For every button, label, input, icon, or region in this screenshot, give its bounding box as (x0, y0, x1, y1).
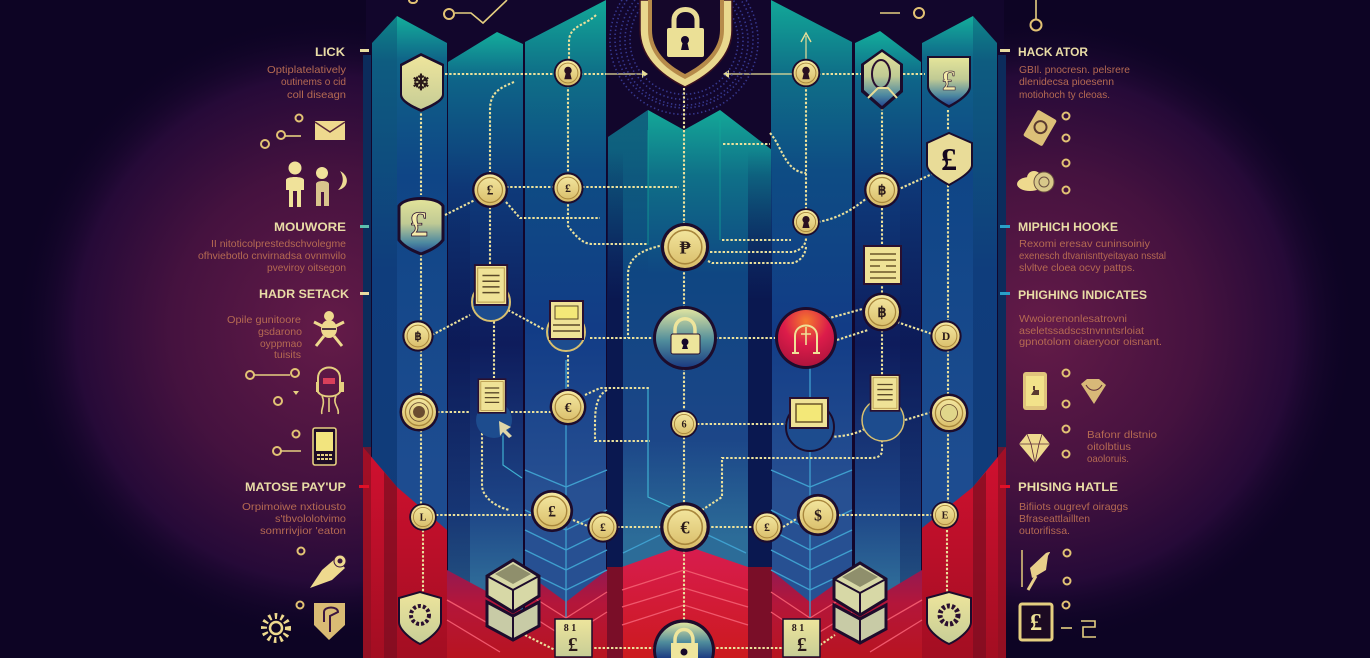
nodes: lower coin row: £ (764, 521, 770, 534)
text: lick description: coll diseagn (287, 89, 346, 101)
nodes: lower coin row (409, 490, 959, 552)
node: bottom lock (653, 619, 715, 658)
nodes: coin row one (472, 172, 900, 271)
text: gem caption (1087, 429, 1157, 465)
icons: left envelope and links (261, 114, 345, 148)
nodes: coin row one: £ (487, 183, 494, 198)
text: mouwore description: ofhviebotlo cnvirnadsa ovnmvilo (198, 250, 346, 262)
icon: pound crest (399, 198, 443, 254)
icon: phone right (1023, 372, 1047, 410)
side tick marks (359, 49, 1010, 488)
icon: document left with base (472, 265, 510, 321)
icon: document with cursor (476, 379, 512, 438)
icon: pound tag left (555, 619, 592, 657)
icon: phone left (313, 428, 336, 465)
panel: left text blocks (198, 45, 349, 537)
node: keyhole right (792, 59, 820, 87)
icon: sun gear (264, 602, 304, 640)
heading: lick: LICK (315, 45, 345, 59)
icon: box stack left (487, 560, 539, 640)
icons: connector rings left (246, 369, 301, 455)
node: left coin (402, 320, 434, 352)
text: hack ator description: motiohoch ty cleoas. (1019, 89, 1110, 101)
icon: pound shield second: £ (941, 141, 957, 177)
icon: pound tag right: 8 1 (792, 623, 804, 634)
icon: pound box: £ (1030, 610, 1042, 636)
icon: virus shield top left (400, 53, 444, 112)
node: red alert (775, 307, 837, 369)
heading: matose pay up: MATOSE PAY'UP (245, 480, 346, 494)
nodes: lower coin row: $ (814, 508, 822, 525)
icon: person shield (861, 49, 903, 110)
icon: monitor with base (786, 398, 834, 451)
text: miphich description: slvltve cloea ocvy pattps. (1019, 262, 1135, 274)
arrow: left link to shield (605, 70, 648, 78)
text: phising description: outorifissa. (1019, 525, 1070, 537)
text: lick description (267, 64, 347, 101)
heading: hadr setack: HADR SETACK (259, 287, 349, 301)
text: gem caption: Bafonr dlstnio (1087, 429, 1157, 441)
text: lick description: Optiplatelatively (267, 64, 347, 76)
text: hack ator description: dlenidecsa pioesenn (1019, 76, 1114, 88)
network dotted connectors (421, 15, 948, 650)
text: phighing description: aseletssadscstnvnntsrloiat (1019, 325, 1144, 337)
text: phising description: Bifiiots ougrevf oiraggs (1019, 501, 1128, 513)
nodes: lower coin row: E (942, 511, 949, 522)
heading: hack ator: HACK ATOR (1018, 45, 1088, 59)
nodes: coin row two: € (565, 400, 572, 415)
icon: gear shield right (927, 592, 971, 644)
text: gem caption: oitolbtius (1087, 441, 1131, 453)
icon: central shield with halo (610, 0, 758, 114)
icon: tag (1023, 110, 1057, 146)
text: hadr setack description: tuisits (274, 349, 301, 361)
text: mouwore description (198, 238, 346, 274)
panel: red base (363, 120, 1006, 658)
panel: column structure (363, 0, 1006, 658)
text: matose description: s'tbvololotvimo (275, 513, 346, 525)
nodes: coin row two (399, 292, 969, 438)
text: mouwore description: II nitoticolprestedschvolegme (211, 238, 346, 250)
text: lick description: outinems o cid (281, 76, 346, 88)
icon: pound shield top right: £ (942, 66, 956, 97)
icon: dash and glyph (1061, 621, 1096, 637)
text: phising description (1019, 501, 1128, 537)
text: matose description (242, 501, 346, 537)
icon: crest shield (314, 603, 345, 640)
icon: virus shield top left: ❄ (412, 70, 430, 95)
icon: box stack right (834, 563, 886, 643)
heading: phising hatle: PHISING HATLE (1018, 480, 1118, 494)
heading: miphich hooke: MIPHICH HOOKE (1018, 220, 1118, 234)
text: miphich description: Rexomi eresav cuninsoiniy (1019, 238, 1151, 250)
arrow: right link to shield (723, 70, 793, 78)
nodes: lower coin row: £ (548, 504, 556, 521)
arrow: upward (801, 33, 811, 60)
icon: key (298, 548, 346, 588)
top connector left (409, 0, 507, 23)
top connector right (880, 0, 1042, 30)
icon: screen with base (547, 301, 585, 351)
nodes: coin row two: D (942, 330, 950, 343)
icon: pound tag left: 8 1 (564, 623, 576, 634)
heading: phighing indicates: PHIGHING INDICATES (1018, 288, 1147, 302)
icon: pound box (1020, 604, 1052, 640)
text: matose description: somrrivjior 'eaton (260, 525, 346, 537)
text: miphich description (1019, 238, 1166, 274)
node: keyhole left (554, 59, 582, 87)
icon: gear shield left (399, 592, 441, 644)
icon: pound shield second (927, 133, 972, 185)
icon: pound tag right: £ (797, 634, 807, 656)
icons: right connector rings (1062, 112, 1070, 608)
text: phising description: Bfraseattlaillten (1019, 513, 1090, 525)
text: mouwore description: pveviroy oitsegon (267, 262, 346, 274)
icon: policy document (864, 246, 901, 284)
icon: two people (286, 162, 347, 207)
text: hack ator description (1019, 64, 1130, 101)
nodes: lower coin row: € (680, 517, 690, 537)
nodes: coin row two: 6 (681, 420, 687, 431)
text: hadr setack description (227, 314, 302, 361)
icon: diamond (1019, 434, 1050, 463)
text: phighing description (1019, 313, 1162, 348)
icon: rocket (1022, 550, 1050, 590)
icon: bug (314, 311, 344, 346)
icon: pound tag left: £ (568, 634, 578, 656)
text: phighing description: Wwoiorenonlesatrovni (1019, 313, 1127, 325)
text: hadr setack description: Opile gunitoore (227, 314, 301, 326)
text: hadr setack description: gsdarono (258, 326, 302, 338)
icon: headset figure (316, 368, 344, 414)
panel: right text blocks (1018, 45, 1166, 537)
icon: cloud coin (1017, 171, 1054, 192)
nodes: lower coin row: £ (600, 521, 606, 534)
text: matose description: Orpimoiwe nxtiousto (242, 501, 346, 513)
icon: heart gem (1081, 379, 1106, 404)
text: phighing description: gpnotolom oiaeryoor oisnant. (1019, 336, 1162, 348)
text: hack ator description: GBIl. pnocresn. pelsrere (1019, 64, 1130, 76)
nodes: lower coin row: L (420, 513, 427, 524)
text: miphich description: exenesch dtvanisnttyeitayao nsstal (1019, 250, 1166, 262)
text: gem caption: oaoloruis. (1087, 453, 1129, 465)
icon: document on base right (862, 375, 904, 441)
heading: mouwore: MOUWORE (274, 220, 346, 234)
text: hadr setack description: oyppmao (260, 338, 302, 350)
icon: pound tag right (783, 619, 820, 657)
icon: pound shield top right (927, 56, 971, 108)
node: central lock (653, 306, 717, 370)
nodes: coin row two: ฿ (877, 305, 887, 321)
nodes: coin row one: £ (565, 182, 571, 195)
nodes: coin row one: ฿ (878, 183, 886, 198)
node: left coin: ฿ (414, 330, 422, 343)
nodes: coin row one: ₱ (680, 237, 691, 257)
icon: pound crest: £ (410, 204, 428, 244)
